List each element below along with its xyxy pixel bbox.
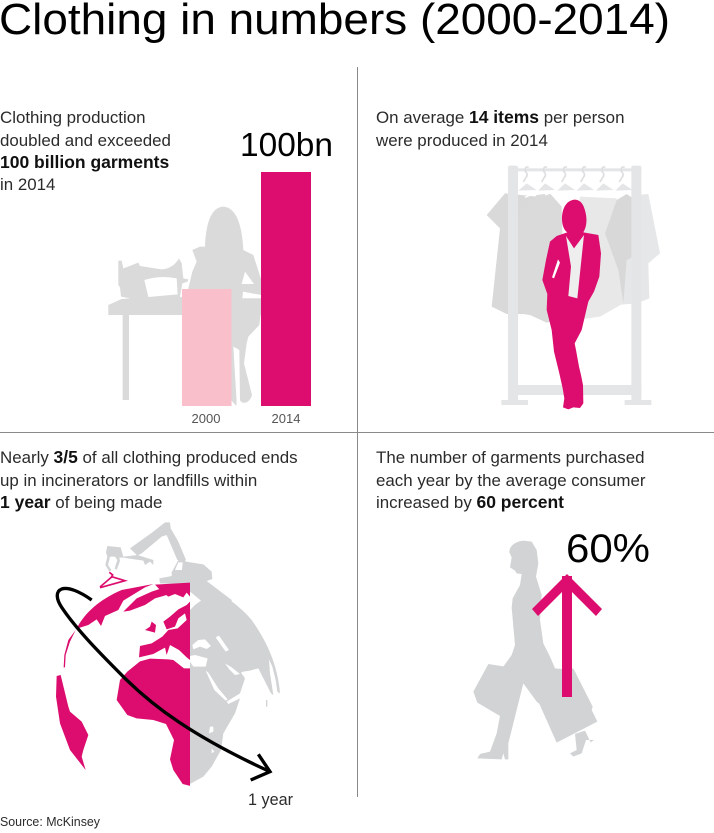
icon: globe west land north	[64, 583, 190, 667]
text block: production: doubled and exceeded	[0, 131, 171, 150]
label: 2000: 2000	[192, 411, 220, 426]
text block: items: 14 items per person	[469, 107, 624, 127]
bar: 2014	[261, 172, 311, 406]
text block: purchases: The number of garments purchased	[376, 448, 645, 467]
text block: purchases: increased by	[376, 493, 476, 512]
arc arrow	[57, 588, 270, 780]
text block: items: On average	[376, 108, 469, 127]
panel: ends in landfill	[0, 447, 298, 809]
label: 1 year: 1 year	[248, 790, 293, 809]
text block: landfill: of being made	[51, 493, 162, 512]
source: Source: McKinsey	[0, 815, 101, 829]
label: 60%: 60%	[566, 527, 650, 571]
panel: purchases	[376, 448, 650, 759]
icon: globe east half	[190, 585, 280, 784]
text block: production: 100 billion garments	[0, 152, 169, 172]
label: 100bn: 100bn	[240, 126, 333, 163]
icon: hanger	[100, 572, 125, 588]
icon: sewing machine and seamstress	[108, 207, 261, 406]
icon: shopper	[473, 541, 597, 759]
bar: 2000	[182, 289, 232, 406]
text block: production: in 2014	[0, 175, 55, 194]
text block: landfill: up in incinerators or landfills within	[0, 471, 257, 490]
icon: globe west land south	[56, 659, 193, 787]
text block: landfill: Nearly	[0, 448, 54, 467]
panel: clothing production	[0, 108, 333, 426]
icon: up arrow	[532, 574, 602, 697]
text block: landfill: 1 year	[0, 492, 51, 512]
text block: purchases: each year by the average consumer	[376, 471, 646, 490]
panel: items per person	[375, 107, 660, 409]
text block: purchases: 60 percent	[476, 492, 564, 512]
label: 2014: 2014	[272, 411, 300, 426]
text block: production: Clothing production	[0, 108, 146, 127]
icon: excavator	[105, 522, 232, 608]
text block: items: were produced in 2014	[375, 131, 548, 150]
figure: woman	[542, 200, 601, 409]
icon: clothes rack	[487, 166, 660, 409]
text block: landfill: 3/5 of all clothing produced ends	[54, 447, 298, 467]
